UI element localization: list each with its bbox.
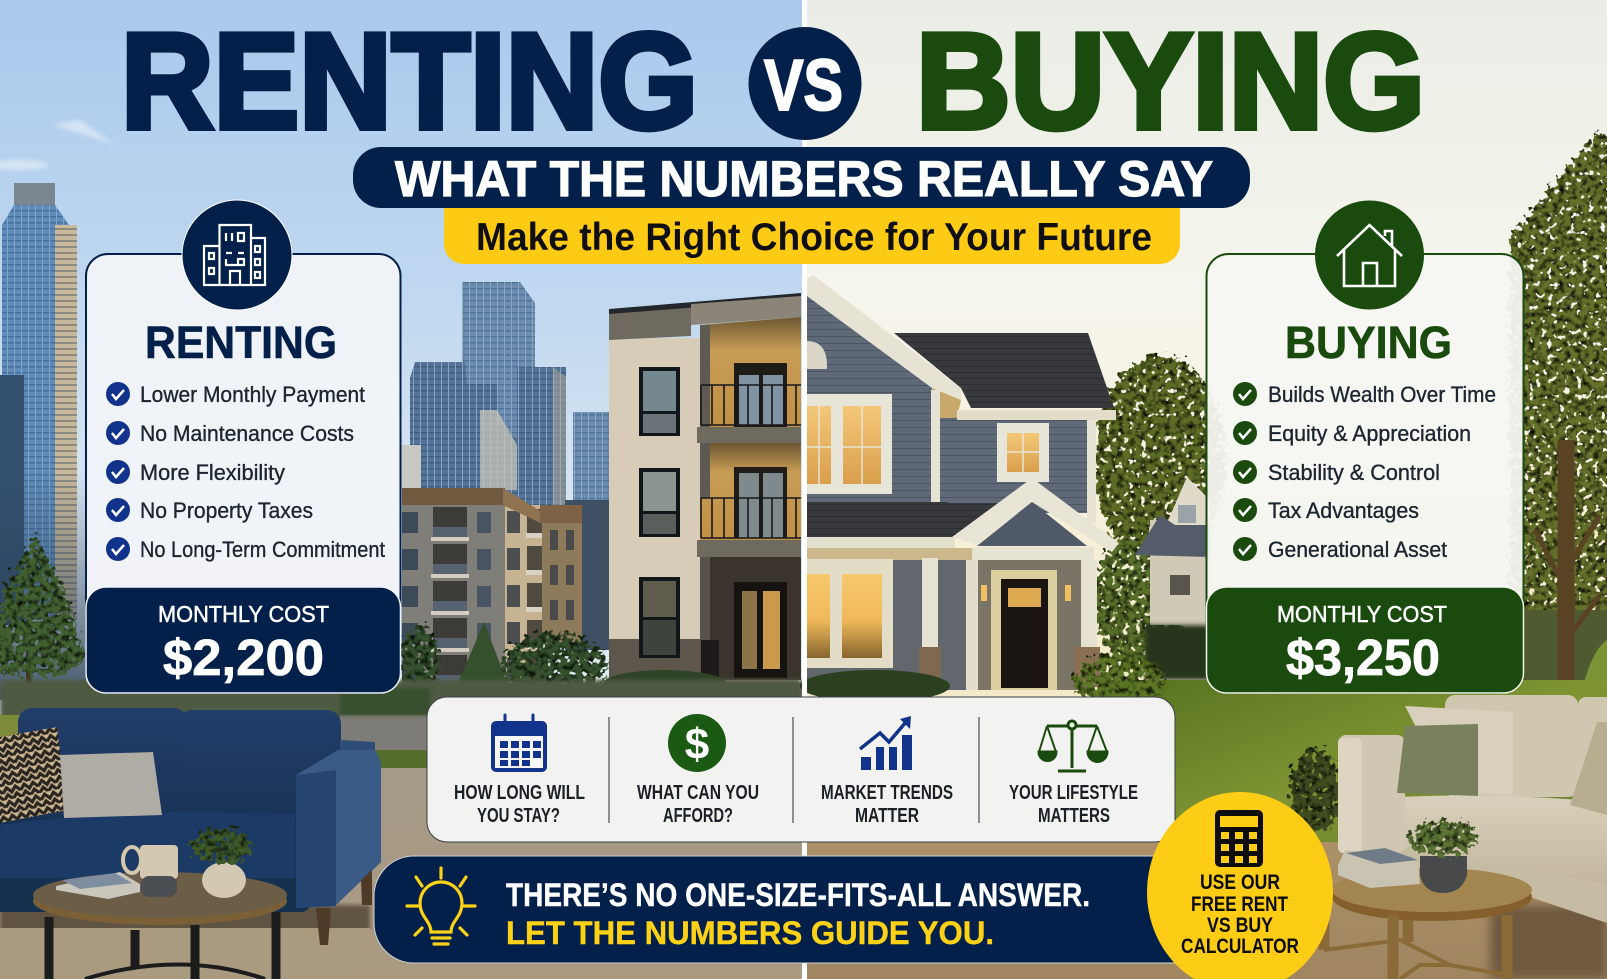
monthly cost (1206, 587, 1524, 693)
title: BUYING: BUYING (916, 5, 1425, 157)
small upper window (997, 423, 1049, 482)
heading: BUYING (1285, 317, 1452, 368)
question: market: MARKET TRENDS (821, 782, 953, 804)
grounds (0, 680, 804, 979)
benefits list (106, 382, 385, 562)
banner: takeaway (374, 856, 1234, 963)
benefits list: No Maintenance Costs (140, 421, 354, 446)
towers centre (401, 282, 609, 650)
coffee table and decor (33, 828, 287, 979)
mid-rise building (402, 488, 582, 690)
benefits list: Lower Monthly Payment (140, 382, 365, 407)
clouds (0, 120, 115, 170)
main house (800, 275, 1166, 710)
lawn (1100, 680, 1607, 870)
title: RENTING: RENTING (121, 5, 698, 157)
icon: calendar (491, 715, 547, 772)
panel: buying (1206, 200, 1524, 693)
icon: calculator (1215, 810, 1263, 867)
left tree (0, 535, 86, 700)
monthly cost: $2,200 (163, 629, 324, 686)
benefits list: Stability & Control (1268, 460, 1440, 485)
blue sofa (0, 708, 381, 945)
tree right (1510, 135, 1607, 700)
question: how long: YOU STAY? (477, 805, 560, 827)
icon: apartment building (182, 200, 292, 310)
benefits list: Equity & Appreciation (1268, 421, 1471, 446)
scene: renting side background (0, 0, 804, 979)
coffee table and decor (1324, 820, 1532, 979)
icon: light bulb (407, 868, 475, 944)
call to action (1181, 871, 1299, 958)
cream sofa (1338, 695, 1607, 923)
panel: decision factors (427, 697, 1175, 842)
porch roof (948, 503, 1000, 537)
monthly cost: MONTHLY COST (158, 601, 329, 627)
gable vent (807, 341, 827, 369)
question: how long: HOW LONG WILL (454, 782, 585, 804)
icon: dollar (668, 714, 726, 772)
message: THERE’S NO ONE-SIZE-FITS-ALL ANSWER. (506, 877, 1090, 913)
question: lifestyle: MATTERS (1038, 805, 1110, 827)
heading: RENTING (145, 317, 337, 368)
benefits list: Generational Asset (1268, 537, 1447, 562)
question: lifestyle (1009, 782, 1138, 827)
call to action: VS BUY (1207, 914, 1273, 937)
question: how long (454, 782, 585, 827)
question: afford: WHAT CAN YOU (637, 782, 759, 804)
icon: rising chart (860, 716, 912, 770)
monthly cost: $3,250 (1286, 629, 1440, 686)
call to action: USE OUR (1200, 871, 1280, 894)
icon: house (1315, 200, 1424, 310)
icon: scales (1039, 720, 1107, 771)
call to action: FREE RENT (1191, 893, 1288, 916)
towers far left (0, 183, 86, 700)
lower wall (807, 558, 1092, 690)
message highlight: LET THE NUMBERS GUIDE YOU. (506, 915, 994, 951)
shrub (1290, 748, 1342, 832)
monthly cost (86, 587, 400, 693)
question: market: MATTER (855, 805, 919, 827)
benefits list: Builds Wealth Over Time (1268, 382, 1496, 407)
house behind (1135, 477, 1210, 680)
balcony doors and rails (734, 363, 787, 427)
lower window (807, 559, 893, 668)
benefits list: No Property Taxes (140, 498, 313, 523)
benefits list: No Long-Term Commitment (140, 537, 385, 562)
door (991, 570, 1057, 690)
question: lifestyle: YOUR LIFESTYLE (1009, 782, 1138, 804)
columns (922, 558, 938, 648)
subtitle ribbon: WHAT THE NUMBERS REALLY SAY (395, 151, 1213, 207)
main apartment building (603, 293, 801, 698)
center divider (802, 0, 807, 979)
porch gable (952, 478, 1119, 552)
benefits list: Tax Advantages (1268, 498, 1419, 523)
question: market (821, 782, 953, 827)
floor (804, 842, 1607, 979)
VS badge: VS (764, 46, 843, 126)
benefits list: More Flexibility (140, 460, 285, 485)
scene: buying side background (800, 0, 1607, 979)
call to action: CALCULATOR (1181, 935, 1299, 958)
callout: calculator badge (1147, 792, 1333, 979)
question: afford: AFFORD? (663, 805, 733, 827)
question: afford (637, 782, 759, 827)
tagline strip: Make the Right Choice for Your Future (476, 216, 1152, 259)
benefits list (1233, 382, 1496, 562)
panel: renting (86, 200, 400, 693)
VS badge (748, 27, 862, 140)
windows (639, 367, 680, 436)
icon: dollar: $ (685, 720, 709, 769)
monthly cost: MONTHLY COST (1277, 601, 1447, 627)
tree mid (1094, 355, 1226, 565)
upper left window (807, 394, 892, 494)
trees mid (400, 622, 607, 697)
bushes (800, 670, 950, 702)
pillows (0, 727, 67, 823)
